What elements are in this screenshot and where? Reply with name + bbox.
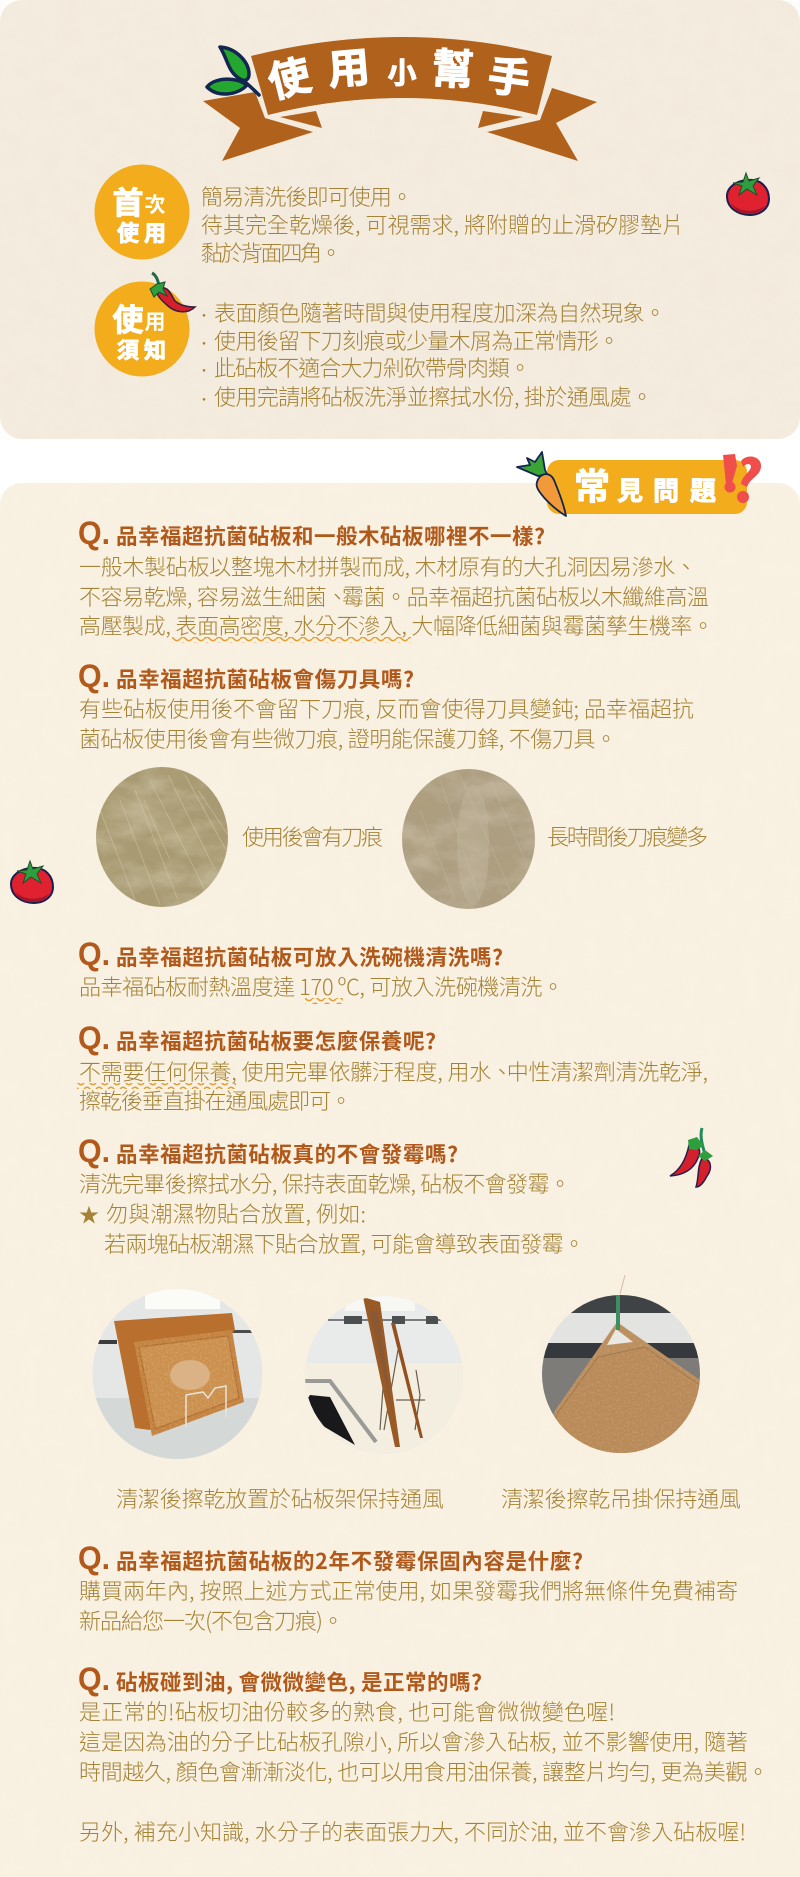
badge: first use: 用 [144, 216, 166, 248]
photo: boards in rack [92, 1289, 262, 1459]
Q1: 高壓製成,表面高密度,水分不滲入,大幅降低細菌與霉菌孳生機率。 [79, 609, 714, 641]
Q7: 砧板碰到油,會微微變色,是正常的嗎? [116, 1666, 482, 1697]
caption: rack: 清潔後擦乾放置於砧板架保持通風 [116, 1482, 444, 1514]
Q3: Q. [78, 936, 110, 972]
panel: usage helper [0, 0, 800, 439]
Q3: 品幸福超抗菌砧板可放入洗碗機清洗嗎? [116, 941, 503, 972]
Q7: 這是因為油的分子比砧板孔隙小,所以會滲入砧板,並不影響使用,隨著 [79, 1725, 748, 1757]
label: more knife marks: 長時間後刀痕變多 [547, 820, 708, 852]
badge: first use [94, 164, 190, 260]
text: usage notes: 表面顏色隨著時間與使用程度加深為自然現象。 [214, 296, 666, 328]
text: usage notes [197, 296, 666, 412]
Q4: Q. [78, 1020, 110, 1056]
panel: FAQ [0, 483, 800, 1877]
badge: usage notes: 用 [144, 306, 166, 336]
Q1: 品幸福超抗菌砧板和一般木砧板哪裡不一樣? [116, 520, 545, 551]
photo: boards from side [305, 1296, 462, 1447]
Q5 [78, 1133, 585, 1259]
Q1 [78, 515, 714, 643]
Q7: 是正常的!砧板切油份較多的熟食,也可能會微微變色喔! [79, 1695, 615, 1727]
caption: hanging: 清潔後擦乾吊掛保持通風 [501, 1482, 741, 1514]
Q1: 不容易乾燥,容易滋生細菌、霉菌。品幸福超抗菌砧板以木纖維高溫 [79, 580, 709, 612]
Q7 [78, 1661, 769, 1847]
badge: usage notes: 知 [144, 333, 166, 365]
Q2: 有些砧板使用後不會留下刀痕,反而會使得刀具變鈍;品幸福超抗 [79, 692, 694, 724]
ribbon title: 手 [484, 42, 534, 108]
FAQ badge: 題 [690, 471, 716, 508]
badge: first use: 使 [117, 216, 139, 248]
Q6: 品幸福超抗菌砧板的2年不發霉保固內容是什麼? [116, 1545, 583, 1576]
Q2: 品幸福超抗菌砧板會傷刀具嗎? [116, 663, 414, 694]
FAQ badge: 常 [574, 458, 610, 510]
Q5: 品幸福超抗菌砧板真的不會發霉嗎? [116, 1138, 458, 1169]
badge: usage notes [94, 282, 190, 376]
ribbon title: 使 [261, 41, 317, 111]
photo: more knife marks [400, 767, 540, 912]
badge: first use: 次 [144, 189, 166, 219]
label: light knife marks: 使用後會有刀痕 [242, 820, 383, 852]
text: usage notes: · [197, 334, 211, 354]
text: first use [201, 180, 684, 268]
Q7: 另外,補充小知識,水分子的表面張力大,不同於油,並不會滲入砧板喔! [79, 1815, 746, 1847]
photo: light knife marks [96, 767, 228, 907]
badge: first use: 首 [112, 178, 144, 223]
Q4: 品幸福超抗菌砧板要怎麼保養呢? [116, 1025, 436, 1056]
ribbon title [261, 33, 534, 111]
badge: usage notes: 使 [112, 295, 144, 340]
text: usage notes: 使用完請將砧板洗淨並擦拭水份,掛於通風處。 [214, 380, 653, 412]
Q4 [77, 1020, 713, 1116]
text: first use: 待其完全乾燥後,可視需求,將附贈的止滑矽膠墊片 [201, 208, 684, 240]
ribbon title: 用 [325, 33, 372, 98]
Q6: 新品給您一次(不包含刀痕)。 [79, 1604, 344, 1636]
text: first use: 黏於背面四角。 [201, 236, 342, 268]
text: usage notes: 使用後留下刀刻痕或少量木屑為正常情形。 [214, 324, 620, 356]
badge: usage notes: 須 [117, 333, 139, 365]
ribbon banner [203, 33, 597, 161]
Q6: Q. [78, 1540, 110, 1576]
text: first use: 簡易清洗後即可使用。 [201, 180, 413, 212]
Q5: Q. [78, 1133, 110, 1169]
Q1: Q. [78, 515, 110, 551]
Q6: 購買兩年內,按照上述方式正常使用,如果發霉我們將無條件免費補寄 [79, 1574, 738, 1606]
icon: exclamation and question marks [723, 454, 761, 503]
text: usage notes: · [197, 390, 211, 410]
text: usage notes: · [197, 306, 211, 326]
text: usage notes: · [197, 361, 211, 381]
Q5: 若兩塊砧板潮濕下貼合放置,可能會導致表面發霉。 [104, 1227, 585, 1259]
icon: double chili [670, 1128, 713, 1187]
text: usage notes: 此砧板不適合大力剁砍帶骨肉類。 [214, 351, 531, 383]
Q2 [78, 658, 694, 754]
FAQ badge: 見 [617, 471, 643, 508]
Q6 [78, 1540, 738, 1636]
Q3: 品幸福砧板耐熱溫度達 170 ºC,可放入洗碗機清洗。 [79, 970, 564, 1002]
Q1: 一般木製砧板以整塊木材拼製而成,木材原有的大孔洞因易滲水、 [79, 550, 691, 582]
icon: chili [150, 273, 195, 312]
Q2: 菌砧板使用後會有些微刀痕,證明能保護刀鋒,不傷刀具。 [79, 722, 617, 754]
string above hanging board [620, 1275, 625, 1294]
icon: leaves [207, 47, 259, 95]
Q4: 擦乾後垂直掛在通風處即可。 [79, 1084, 352, 1116]
FAQ badge: 問 [653, 471, 679, 508]
icon: carrot [517, 452, 566, 516]
icon: tomato top right [727, 173, 769, 215]
Q7: 時間越久,顏色會漸漸淡化,也可以用食用油保養,讓整片均勻,更為美觀。 [79, 1755, 769, 1787]
Q5: 清洗完畢後擦拭水分,保持表面乾燥,砧板不會發霉。 [79, 1167, 571, 1199]
Q5: ★ [79, 1199, 99, 1228]
Q4: 不需要任何保養,使用完畢依髒汙程度,用水、中性清潔劑清洗乾淨, [79, 1055, 713, 1087]
icon: tomato left [11, 861, 53, 903]
photo: hanging board [542, 1295, 700, 1453]
Q3 [78, 936, 564, 1004]
ribbon title: 小 [387, 50, 417, 92]
Q7: Q. [78, 1661, 110, 1697]
Q5: 勿與潮濕物貼合放置,例如: [106, 1197, 366, 1229]
ribbon title: 幫 [430, 35, 475, 98]
Q2: Q. [78, 658, 110, 694]
FAQ badge [547, 458, 747, 514]
